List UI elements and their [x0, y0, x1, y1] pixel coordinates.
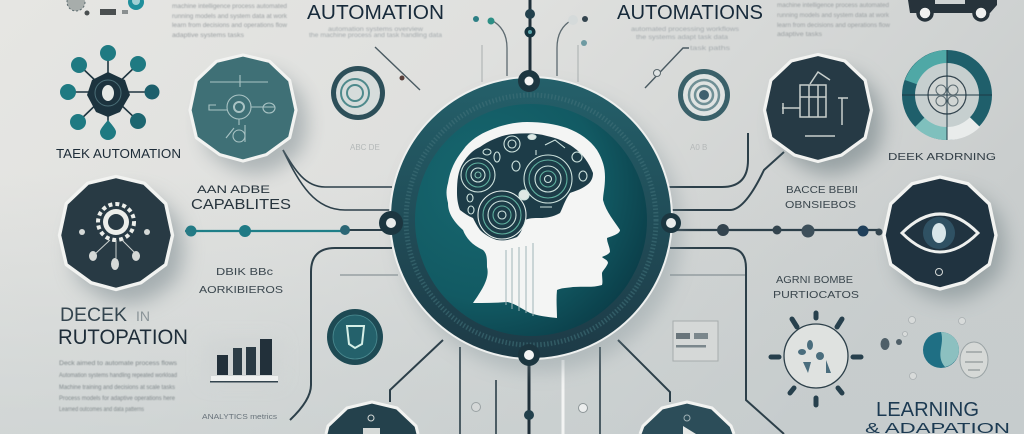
- brain spirals: [461, 134, 587, 239]
- text block: automations top right sub: the systems adapt task data: [636, 35, 729, 41]
- bar chart: [205, 339, 280, 382]
- text block: left paragraph: Process models for adaptive operations here: [59, 395, 175, 402]
- heading: right upper label: [785, 185, 858, 211]
- icon: learning globe and head: [880, 316, 988, 380]
- heading: capabilities: AAN ADBE: [197, 184, 270, 196]
- ring node bottom: [518, 344, 540, 366]
- heading: rutopation: RUTOPATION: [58, 326, 188, 349]
- text block: left paragraph: Learned outcomes and data patterns: [59, 406, 145, 413]
- brain: [457, 133, 593, 240]
- text block: top left paragraph: learn from decisions and operations flow: [172, 22, 287, 29]
- text block: automations top right sub: task paths: [690, 46, 730, 52]
- head silhouette: [446, 122, 620, 318]
- heading: automation top left: AUTOMATION: [307, 2, 444, 24]
- icon: task automation network: [60, 45, 160, 140]
- heading: right upper label: BACCE BEBII: [786, 185, 858, 196]
- text block: top right paragraph: running models and system data at work: [777, 12, 890, 19]
- ring node left: [379, 211, 403, 235]
- ring node top: [518, 70, 540, 92]
- heading: acceleration label: [199, 266, 283, 296]
- text block: top right paragraph: [777, 2, 890, 38]
- text block: left paragraph: Deck aimed to automate process flows: [59, 360, 178, 367]
- text block: top left paragraph: running models and system data at work: [172, 13, 288, 20]
- connector lines: [185, 0, 878, 434]
- text block: top left paragraph: [172, 3, 288, 39]
- heading: learning and adaptation: [865, 399, 1010, 434]
- heading: automation label: PURTIOCATOS: [773, 289, 859, 301]
- icon: small badge bottom: [327, 309, 383, 365]
- text block: automation top left sub: automation systems overview: [328, 27, 424, 33]
- text block: top right paragraph: adaptive tasks: [777, 31, 823, 38]
- heading: learning and adaptation: LEARNING: [876, 399, 979, 421]
- neck lines: [506, 243, 533, 316]
- icon: truck: [908, 0, 997, 20]
- panel: bottom right hexagon: [640, 402, 734, 434]
- text block: left paragraph: Automation systems handling repeated workload: [59, 372, 177, 379]
- icon: top left cropped cluster: [67, 0, 144, 16]
- heading: automation label: [773, 275, 859, 301]
- heading: right upper label: OBNSIEBOS: [785, 200, 856, 211]
- icon: small spiral circle left: [331, 66, 385, 120]
- panel: teal hexagon icon: [190, 55, 308, 175]
- text block: automation top left sub: the machine process and task handling data: [309, 33, 443, 39]
- panel: dark machine icon: [764, 54, 884, 175]
- heading: automation label: AGRNI BOMBE: [776, 275, 853, 286]
- heading: capabilities: CAPABLITES: [191, 196, 291, 213]
- icon: segmented wheel: [902, 50, 992, 140]
- icon: ship wheel: [771, 313, 861, 405]
- text block: left paragraph: [59, 360, 178, 413]
- text block: top right paragraph: learn from decisions and operations flow: [777, 22, 890, 29]
- text block: left paragraph: Machine training and decisions at scale tasks: [59, 384, 176, 391]
- heading: rutopation: [58, 305, 188, 349]
- heading: rutopation: DECEK: [60, 305, 127, 326]
- panel: bottom left hexagon: [326, 402, 418, 434]
- central brain emblem: [379, 70, 682, 372]
- text block: top left paragraph: adaptive systems tasks: [172, 32, 245, 39]
- caption: bar chart: ANALYTICS metrics: [202, 412, 277, 421]
- panel: eye icon: [884, 177, 1006, 301]
- text block: automation top left sub: [309, 27, 443, 39]
- caption: small spiral right: A0 B: [690, 143, 707, 152]
- text block: top left paragraph: machine intelligence process automated: [172, 3, 287, 10]
- ring node right: [661, 213, 681, 233]
- icon: small spiral circle right: [678, 69, 730, 121]
- heading: automations top right: AUTOMATIONS: [617, 2, 763, 24]
- text block: automations top right sub: [631, 27, 739, 52]
- caption: small spiral left: ABC DE: [350, 143, 380, 152]
- connector nodes: [186, 9, 882, 420]
- text block: automations top right sub: automated processing workflows: [631, 27, 739, 33]
- panel: small document card: [673, 321, 718, 361]
- heading: rutopation: IN: [136, 308, 150, 324]
- heading: acceleration label: AORKIBIEROS: [199, 284, 283, 296]
- heading: capabilities: [191, 184, 291, 213]
- heading: task automation: TAEK AUTOMATION: [56, 147, 181, 161]
- text block: top right paragraph: machine intelligence process automated: [777, 2, 889, 9]
- heading: deek adrning: DEEK ARDRNING: [888, 151, 996, 163]
- panel: dark gear icon: [60, 176, 184, 304]
- heading: acceleration label: DBIK BBc: [216, 266, 273, 278]
